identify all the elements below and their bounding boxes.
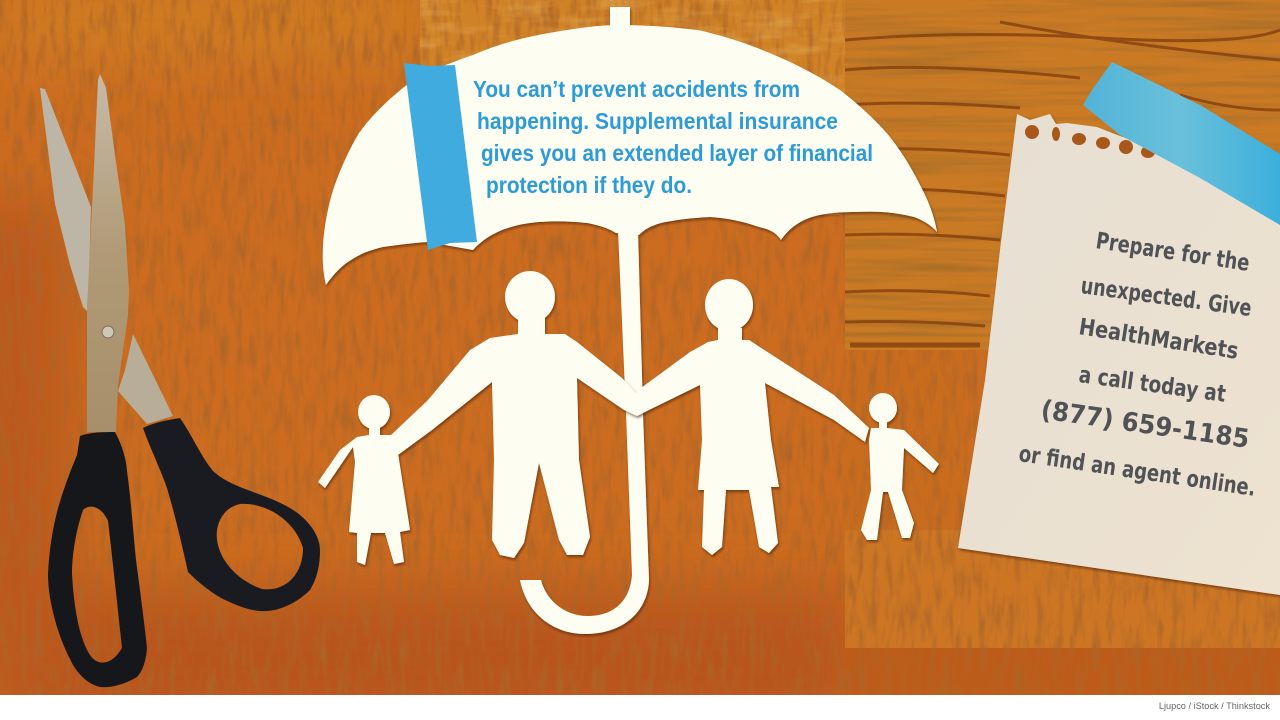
umbrella message: gives you an extended layer of financial xyxy=(481,140,873,166)
lower blade xyxy=(118,334,173,424)
paper family xyxy=(318,271,939,565)
umbrella message: happening. Supplemental insurance xyxy=(477,108,838,134)
left handle xyxy=(48,432,147,687)
note message: (877) 659-1185 xyxy=(1039,395,1251,455)
right handle xyxy=(143,418,320,611)
front blade xyxy=(87,74,129,432)
scissors xyxy=(40,74,320,687)
girl xyxy=(318,395,410,565)
umbrella handle xyxy=(520,230,649,634)
rear blade xyxy=(40,88,91,312)
note paper xyxy=(958,114,1280,595)
umbrella message: You can’t prevent accidents from xyxy=(473,76,800,102)
footer strip xyxy=(0,695,1280,720)
note message xyxy=(1017,228,1257,502)
umbrella knob xyxy=(610,7,630,29)
note tape xyxy=(1083,62,1280,225)
mother xyxy=(631,279,869,555)
umbrella canopy xyxy=(323,25,937,285)
umbrella xyxy=(323,7,937,634)
father xyxy=(390,271,651,558)
note perforations xyxy=(1025,125,1155,158)
photo credit: Ljupco / iStock / Thinkstock xyxy=(1159,701,1270,711)
blue tape on umbrella xyxy=(404,63,477,250)
pivot screw xyxy=(102,326,114,338)
note message: HealthMarkets xyxy=(1077,314,1240,365)
note message: a call today at xyxy=(1077,362,1227,408)
umbrella message: protection if they do. xyxy=(486,172,692,198)
umbrella message xyxy=(473,76,873,198)
boy xyxy=(861,393,939,540)
